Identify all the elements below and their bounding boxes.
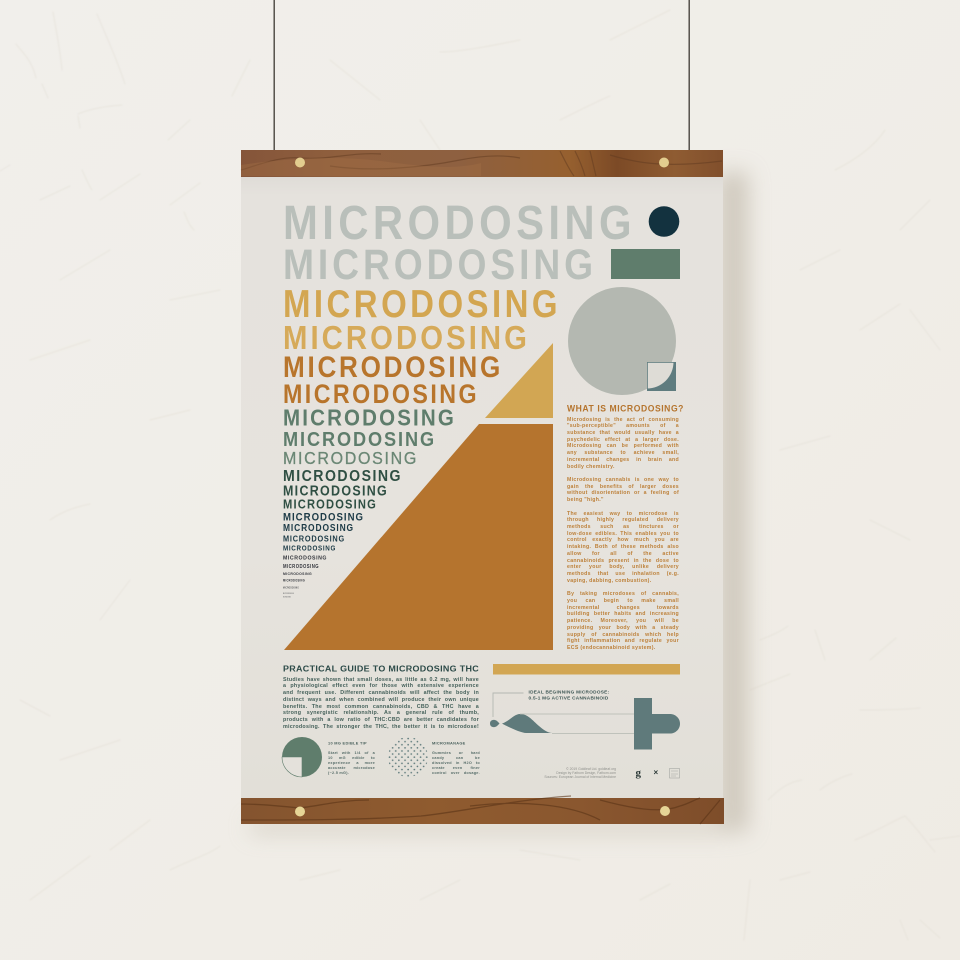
shape: small gold triangle (485, 343, 553, 418)
text block: what is microdosing body: incremental changes in brain and (567, 457, 679, 463)
heading: practical guide: PRACTICAL GUIDE TO MICRODOSING THC (283, 664, 479, 674)
label: ideal beginning microdose (528, 690, 610, 700)
icon: dropper with droplet (490, 698, 680, 750)
brass screw (295, 158, 305, 168)
text block: what is microdosing body: providing your body with a steady (567, 625, 679, 631)
label: 10 mg edible tip: 10 MG EDIBLE TIP (328, 740, 367, 746)
icon: dotted circle (388, 737, 428, 777)
poster shadow (250, 172, 748, 834)
credits: © 2019 Goldleaf Ltd. goldleaf.org (566, 767, 616, 771)
text block: what is microdosing body: incremental changes towards (567, 605, 679, 611)
shape: navy circle (649, 206, 679, 237)
text block: practical guide body: microdosing. The stronger the THC, the better it is to microdose! (283, 724, 479, 730)
label: ideal beginning microdose: IDEAL BEGINNING MICRODOSE: (528, 690, 610, 694)
title stack: repeated MICRODOSING shrinking: MICRODOSING (283, 319, 530, 356)
text block: what is microdosing body: enter your body, unlike delivery (567, 564, 679, 570)
gold bar (493, 664, 680, 674)
text block: what is microdosing body: fight inflammation and regulate your (567, 638, 679, 644)
text block: micromanage: Gummies or hard (432, 750, 480, 754)
shape: green rectangle (611, 249, 680, 279)
text block: micromanage: create even finer (432, 766, 480, 770)
text block: what is microdosing body: control exactly how much you are (567, 537, 679, 543)
text block: edible tip: experience a more (328, 761, 375, 765)
credits: Sources: European Journal of Internal Medicine (544, 775, 616, 779)
title stack: repeated MICRODOSING shrinking: MICRODOSING (283, 283, 561, 326)
hanging wire right (688, 0, 690, 150)
title stack: repeated MICRODOSING shrinking: MICRODOSING (283, 596, 291, 598)
icon: quarter dose circle (282, 737, 322, 777)
text block: micromanage: control over dosage. (432, 771, 480, 775)
text block: what is microdosing body: low-dose edibles. This enables you to (567, 531, 679, 537)
text block: practical guide body (283, 676, 481, 732)
title stack: repeated MICRODOSING shrinking: MICRODOSING (283, 564, 319, 570)
text block: micromanage (432, 750, 481, 778)
title stack: repeated MICRODOSING shrinking: MICRODOSING (283, 586, 299, 590)
shape: large grey circle (568, 287, 676, 395)
brass screw (660, 806, 670, 816)
title stack: repeated MICRODOSING shrinking: MICRODOSING (283, 428, 436, 451)
title stack: repeated MICRODOSING shrinking: MICRODOSING (283, 571, 312, 576)
top wooden hanger bar (241, 150, 723, 177)
text block: what is microdosing body (567, 416, 681, 652)
title stack: repeated MICRODOSING shrinking: MICRODOSING (283, 496, 377, 512)
text block: what is microdosing body: methods that use inhalation (e.g. (567, 571, 679, 577)
text block: what is microdosing body: bodily chemistry. (567, 464, 615, 470)
text block: what is microdosing body: methods such as tinctures or (567, 524, 679, 530)
text block: what is microdosing body: you can begin to make small (567, 598, 679, 604)
title stack: repeated MICRODOSING shrinking: MICRODOSING (283, 523, 354, 534)
text block: micromanage: dissolved in H2O to (432, 761, 480, 765)
text block: practical guide body: benefits. The most common cannabinoids, CBD & THC have a (283, 704, 479, 710)
title stack: repeated MICRODOSING shrinking: MICRODOSING (283, 512, 364, 524)
text block: what is microdosing body: Microdosing cannabis is one way to (567, 477, 679, 483)
leader line to droplet (493, 693, 524, 717)
text block: edible tip: Start with 1/4 of a (328, 750, 375, 754)
label: micromanage: MICROMANAGE (432, 740, 466, 746)
title stack: repeated MICRODOSING shrinking: MICRODOSING (283, 197, 636, 250)
title stack: repeated MICRODOSING shrinking: MICRODOSING (283, 556, 327, 562)
text block: what is microdosing body: The easiest way to microdose is (567, 511, 679, 517)
title stack: repeated MICRODOSING shrinking: MICRODOSING (283, 448, 418, 468)
title stack: repeated MICRODOSING shrinking: MICRODOSING (283, 578, 305, 582)
title stack: repeated MICRODOSING shrinking: MICRODOSING (283, 593, 294, 595)
text block: what is microdosing body: Microdosing is the act of consuming (567, 416, 679, 422)
text block: what is microdosing body: without disorientation or a feeling of (567, 490, 679, 496)
text block: what is microdosing body: supply of cannabinoids which help (567, 632, 679, 638)
credits (526, 767, 616, 781)
text block: what is microdosing body: building better habits and increasing (567, 611, 679, 617)
text block: what is microdosing body: Microdosing can be performed with (567, 443, 679, 449)
shape: small square with quarter arc (647, 362, 676, 391)
text block: what is microdosing body: any substance to achieve small, (567, 450, 679, 456)
poster paper panel (241, 150, 724, 824)
brass screw (659, 158, 669, 168)
logo: g: g (636, 767, 642, 779)
text block: what is microdosing body: psychedelic effect at a larger dose. (567, 437, 679, 443)
text block: what is microdosing body: being "high." (567, 497, 604, 503)
text block: practical guide body: distinct ways and when combined will produce their own unique (283, 697, 479, 703)
text block: practical guide body: and frequent use. Different cannabinoids will affect the body in (283, 690, 479, 696)
text block: what is microdosing body: By taking microdoses of cannabis, (567, 591, 679, 597)
text block: practical guide body: a physiological effect even for those with extensive experience (283, 683, 479, 689)
text block: what is microdosing body: patience. Moreover, you will be (567, 618, 679, 624)
text block: micromanage: candy can be (432, 756, 480, 760)
text block: practical guide body: Studies have shown that small doses, as little as 0.2 mg, will have (283, 676, 479, 682)
label: ideal beginning microdose: 0.5-1 MG ACTIVE CANNABINOID (528, 696, 609, 700)
text block: practical guide body: strong synergistic relationship. As a general rule of thumb, (283, 710, 479, 716)
title stack: repeated MICRODOSING shrinking: MICRODOSING (283, 468, 402, 485)
shape: large orange triangle (284, 424, 553, 650)
text block: what is microdosing body: cannabinoids present in the dose to (567, 558, 679, 564)
brass screw (295, 806, 305, 816)
text block: what is microdosing body: allow for all of the active (567, 551, 679, 557)
title stack: repeated MICRODOSING shrinking: MICRODOSING (283, 544, 336, 552)
credits: Design by Fathom Design, Fathom.com (556, 771, 616, 775)
text block: what is microdosing body: gain the benefits of larger doses (567, 484, 679, 490)
text block: practical guide body: products with a low ratio of THC:CBD are better candidates for (283, 717, 479, 723)
text block: what is microdosing body: intaking. Both of these methods also (567, 544, 679, 550)
text block: edible tip: accurate microdose (328, 766, 375, 770)
text block: edible tip: (~2.5 mG). (328, 771, 349, 775)
bottom wooden hanger bar (241, 796, 724, 824)
text block: what is microdosing body: ECS (endocannabinoid system). (567, 645, 656, 651)
title stack: repeated MICRODOSING shrinking: MICRODOSING (283, 484, 388, 500)
text block: what is microdosing body: "sub-perceptible" amounts of a (567, 423, 679, 429)
title stack: repeated MICRODOSING shrinking (283, 197, 636, 598)
hanging wire left (274, 0, 275, 150)
text block: what is microdosing body: vaping, dabbing, combustion). (567, 578, 652, 584)
title stack: repeated MICRODOSING shrinking: MICRODOSING (283, 351, 503, 384)
logo: partner box (670, 768, 680, 778)
title stack: repeated MICRODOSING shrinking: MICRODOSING (283, 534, 345, 544)
text block: edible tip: 10 mG edible to (328, 756, 375, 760)
logo: times sign: × (654, 768, 658, 777)
heading: what is microdosing: WHAT IS MICRODOSING? (567, 404, 684, 414)
title stack: repeated MICRODOSING shrinking: MICRODOSING (283, 379, 479, 409)
title stack: repeated MICRODOSING shrinking: MICRODOSING (283, 241, 597, 289)
text block: edible tip (328, 750, 376, 778)
text block: what is microdosing body: through highly regulated delivery (567, 517, 679, 523)
title stack: repeated MICRODOSING shrinking: MICRODOSING (283, 404, 456, 430)
text block: what is microdosing body: substance that would usually have a (567, 430, 679, 436)
